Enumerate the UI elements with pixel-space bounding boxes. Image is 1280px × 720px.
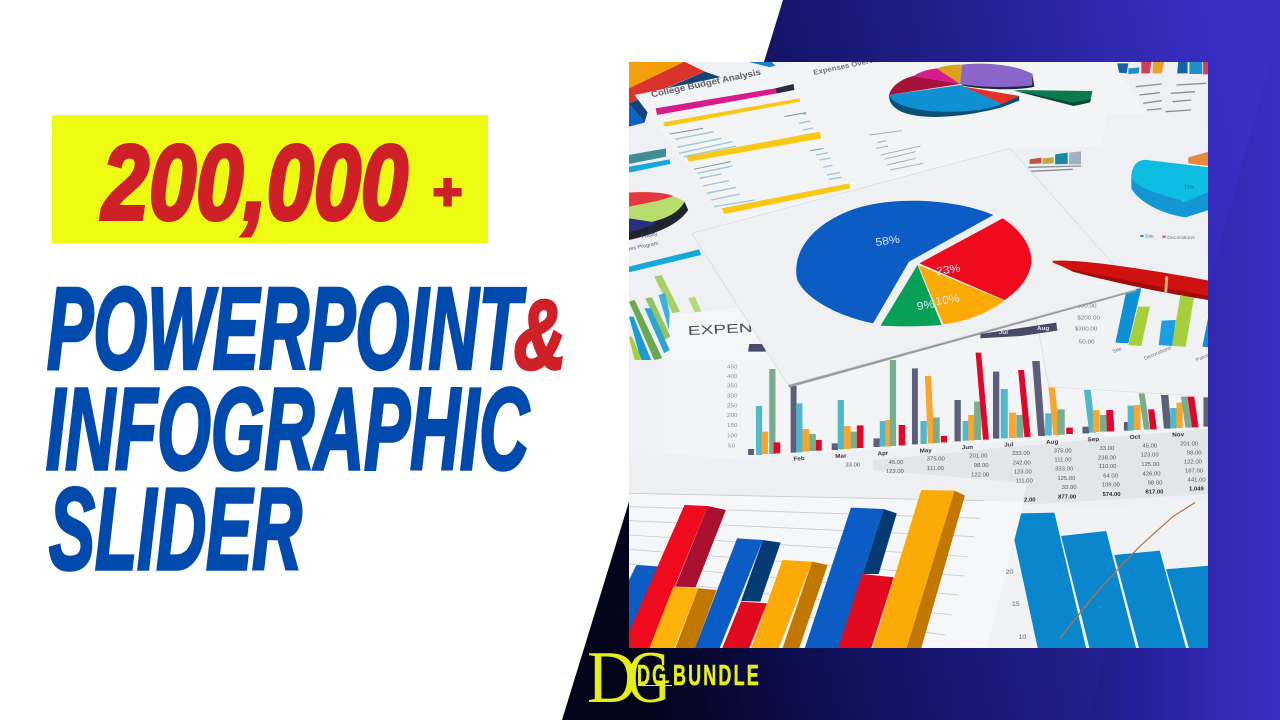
title line: SLIDER: SLIDER [49, 464, 302, 594]
bar chart paper with monthly bars: 33.00 [845, 463, 860, 468]
bar chart paper with monthly bars: 98.00 [974, 463, 989, 469]
bar chart paper with monthly bars: 400 [727, 374, 738, 380]
navy header strip with Jul and Aug [980, 323, 1057, 338]
bar chart paper with monthly bars: 123.00 [1014, 470, 1032, 475]
bar chart paper with monthly bars: 122.00 [971, 473, 989, 478]
bar chart paper with monthly bars: Jul [1004, 442, 1014, 449]
bar chart paper with monthly bars: Nov [1172, 432, 1185, 439]
left paper pieces [628, 148, 777, 360]
bar chart paper with monthly bars: 125.00 [1057, 476, 1075, 482]
bar chart paper with monthly bars: 201.00 [1180, 442, 1198, 448]
bar chart paper with monthly bars: 33.00 [1100, 446, 1114, 452]
bar chart paper with monthly bars: 200 [727, 413, 738, 419]
paper: lower right with green bars: $00.00 [1077, 304, 1097, 309]
bar chart paper with monthly bars: 45.00 [889, 460, 903, 466]
bar chart paper with monthly bars: 350 [727, 384, 738, 390]
left paper pieces: Futility [641, 231, 658, 240]
bar chart paper with monthly bars: 111.00 [927, 466, 944, 472]
main paper with big pie chart: 58% [874, 233, 901, 249]
bar chart paper with monthly bars: Sep [1087, 437, 1100, 443]
bar chart paper with monthly bars: 300 [727, 394, 738, 399]
paper: college budget analysis: Expenses Overview [812, 53, 887, 77]
orange lower bar [649, 587, 717, 648]
blue column chart: 15 [1012, 601, 1020, 608]
cyan 3D heart pie: 71% [1184, 185, 1195, 190]
bar chart paper with monthly bars: 33.00 [1062, 485, 1077, 491]
cyan 3D heart pie: Site [1145, 234, 1154, 239]
badge: 200,000+: + [432, 164, 461, 220]
pie slice: 10% [918, 265, 1004, 324]
bar chart paper with monthly bars: Jun [962, 445, 974, 451]
bar chart paper with monthly bars: 450 [727, 365, 738, 371]
top right bars [1117, 62, 1209, 112]
bar chart paper with monthly bars: 110.00 [1099, 464, 1116, 470]
bar chart paper with monthly bars: Apr [877, 451, 889, 457]
blue column chart: 10 [1019, 634, 1027, 641]
ampersand: & [514, 280, 566, 390]
paper: lower right with green bars [1036, 288, 1208, 397]
bar chart paper with monthly bars: 123.00 [886, 469, 904, 475]
red lower bar [838, 574, 894, 648]
badge: 200,000+: 200,000 [100, 124, 408, 242]
bar chart paper with monthly bars: 500 [727, 356, 738, 361]
bar chart paper with monthly bars: Feb [793, 456, 805, 463]
logo: DG Bundle: BUNDLE [673, 660, 761, 692]
paper: lower right with green bars: 50.00 [1079, 340, 1095, 345]
title line: POWERPOINT: POWERPOINT [47, 264, 526, 394]
paper: college budget analysis [628, 53, 1209, 388]
left paper pieces: res Program [628, 241, 660, 252]
red lower bar [722, 602, 767, 648]
left paper pieces: EXPEN [688, 321, 753, 338]
logo: DG Bundle: D [587, 637, 637, 719]
bar chart paper with monthly bars: 375.00 [1054, 449, 1072, 454]
paper: lower right with green bars: $300.00 [1075, 327, 1098, 333]
bar chart paper with monthly bars: 375.00 [927, 457, 945, 463]
logo: DG Bundle: G [627, 637, 671, 719]
bar chart paper with monthly bars: 1,049 [1189, 487, 1204, 493]
background: slanted blue panel [562, 0, 1280, 720]
bar chart paper with monthly bars: 441.00 [1188, 478, 1206, 483]
pie slice: 23% [919, 218, 1031, 300]
bar chart paper with monthly bars: 201.00 [969, 454, 987, 460]
bar chart paper with monthly bars: Aug [1046, 440, 1059, 446]
paper: lower right with green bars: $200.00 [1077, 316, 1101, 321]
bar chart paper with monthly bars: 125.00 [1141, 462, 1159, 468]
bar chart paper with monthly bars: 187.00 [1185, 469, 1203, 474]
pie slice: 9% [881, 265, 942, 326]
tall orange bar [872, 490, 965, 648]
paper: lower left 3D bar chart [629, 472, 1208, 648]
paper: college budget analysis: College Budget Analysis [650, 67, 762, 99]
blue back bar [629, 565, 658, 632]
bar chart paper with monthly bars: May [920, 448, 933, 455]
bar chart paper with monthly bars: Mar [835, 454, 847, 460]
logo: DG Bundle: DG [637, 660, 668, 692]
paper: lower right with green bars: Paints [1195, 352, 1212, 363]
pie slice: 58% [796, 201, 993, 323]
bar chart paper with monthly bars: 122.00 [1184, 460, 1202, 465]
blue bar [695, 538, 781, 648]
photo: charts on desk [628, 53, 1212, 650]
logo: DG Bundle [587, 637, 761, 719]
title line: INFOGRAPHIC: INFOGRAPHIC [46, 364, 530, 494]
bar chart paper with monthly bars: 426.00 [1142, 472, 1161, 477]
bar chart paper with monthly bars: 2.00 [1024, 498, 1036, 503]
bar chart paper with monthly bars: 238.00 [1098, 456, 1116, 461]
paper: lower right with green bars: Decorations [1143, 345, 1173, 362]
bar chart paper with monthly bars: 100 [727, 434, 738, 439]
bar chart paper with monthly bars: 111.00 [1016, 479, 1033, 484]
small bars in budget paper [1028, 151, 1081, 171]
bar chart paper with monthly bars: 877.00 [1058, 495, 1076, 501]
bar chart paper with monthly bars: 45.00 [1142, 444, 1157, 450]
bar chart paper with monthly bars: 98.00 [1148, 481, 1162, 487]
bar chart paper with monthly bars: 333.00 [1055, 467, 1073, 472]
main paper with big pie chart [692, 148, 1209, 388]
bar chart paper with monthly bars: 242.00 [1013, 461, 1031, 466]
cyan 3D heart pie: Decorations [1167, 235, 1195, 241]
bar chart paper with monthly bars: 250 [727, 404, 738, 409]
blue column chart [1006, 503, 1209, 648]
bar chart paper with monthly bars [727, 352, 1208, 504]
main paper with big pie chart: 10% [934, 292, 961, 308]
bar chart paper with monthly bars: 150 [727, 423, 738, 429]
title [46, 264, 566, 594]
blue column chart: 20 [1006, 569, 1014, 576]
red bar [629, 505, 726, 648]
bar chart paper with monthly bars: 123.00 [1141, 453, 1159, 459]
navy header strip with Jul and Aug: Aug [1037, 326, 1050, 332]
bar chart paper with monthly bars: 64.00 [1103, 474, 1118, 479]
bar chart paper with monthly bars: 98.00 [1187, 451, 1202, 457]
bar chart paper with monthly bars: Oct [1130, 435, 1140, 441]
bar chart paper with monthly bars: 111.00 [1054, 458, 1072, 463]
bar chart paper with monthly bars: 50 [728, 444, 736, 450]
main paper with big pie chart: 9% [916, 298, 935, 313]
orange bar [751, 560, 828, 648]
navy header strip with Jul and Aug: Jul [999, 330, 1008, 336]
bar chart paper with monthly bars: 333.00 [1012, 451, 1030, 457]
tall blue bar [805, 508, 897, 648]
small 3D pie chart [889, 64, 1092, 117]
main paper with big pie chart: 23% [935, 262, 961, 278]
bar chart paper with monthly bars: 817.00 [1145, 490, 1163, 496]
red pen [1053, 261, 1209, 300]
bar chart paper with monthly bars: 574.00 [1102, 492, 1121, 498]
paper: lower right with green bars: Site [1112, 346, 1123, 355]
bar chart paper with monthly bars: 109.00 [1102, 483, 1120, 489]
cyan 3D heart pie [1131, 152, 1209, 241]
